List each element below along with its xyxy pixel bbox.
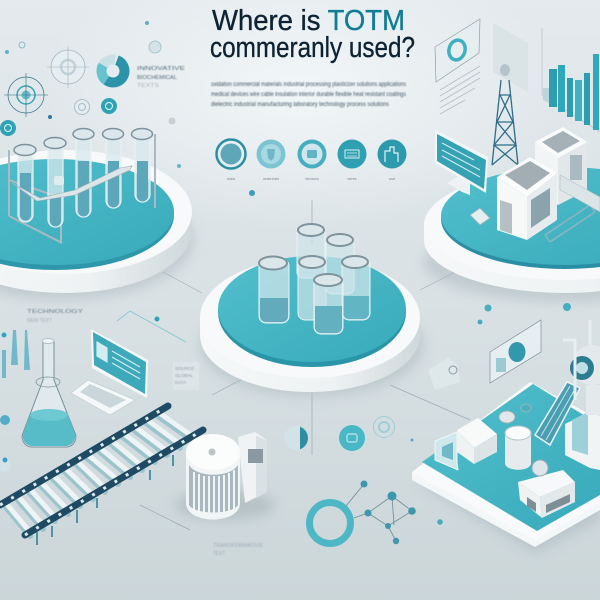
teal accent bbox=[117, 311, 186, 342]
label: innovative: BIOCHEMICAL bbox=[137, 75, 177, 81]
rack shelf bbox=[12, 166, 132, 201]
monitor bbox=[435, 130, 488, 199]
icon: camera bbox=[298, 140, 326, 181]
panel: right platform with servers bbox=[423, 127, 600, 302]
dots bbox=[410, 303, 571, 525]
icon: camera: devices bbox=[305, 176, 319, 181]
conveyor belt bbox=[0, 406, 203, 545]
server rear bbox=[535, 127, 587, 205]
dotted data panel bbox=[493, 23, 528, 92]
label: innovative: INNOVATIVE bbox=[137, 66, 185, 72]
blurry text card bbox=[173, 362, 199, 390]
panel: bottom-right isometric platform bbox=[412, 320, 600, 553]
tube 5 bbox=[132, 128, 152, 202]
blurry caption bbox=[213, 543, 264, 557]
chart: ring bbox=[310, 502, 350, 544]
jar back right bbox=[326, 234, 354, 294]
icon: buildings: use bbox=[389, 176, 396, 181]
icons: small circles bbox=[0, 21, 255, 196]
small table and parts bbox=[470, 205, 595, 242]
small disc items bbox=[499, 404, 531, 423]
side box bbox=[238, 432, 267, 503]
icon: shield: materials bbox=[263, 176, 279, 181]
half circle bbox=[284, 426, 308, 450]
icon: ring gauge: data bbox=[227, 176, 236, 181]
platform base bbox=[412, 382, 600, 553]
jars bbox=[259, 224, 370, 334]
label: technology bbox=[27, 309, 83, 324]
ramp bbox=[535, 382, 580, 445]
jar back left bbox=[297, 224, 325, 278]
panel: center platform with jars bbox=[200, 224, 424, 397]
machine tower bbox=[563, 320, 600, 470]
cylinder jar bbox=[505, 426, 531, 470]
legs bbox=[37, 455, 173, 545]
label: innovative: TEXTS bbox=[137, 83, 159, 89]
icon: factory: wires bbox=[347, 176, 357, 181]
bar chart bbox=[542, 28, 600, 132]
icon: ring gauge bbox=[216, 140, 246, 181]
text block: intro paragraph: medical devices wire cable insulation interior durable flexible heat resistant coatings bbox=[211, 92, 406, 98]
platform disc bbox=[423, 167, 600, 302]
chart: donut bbox=[97, 55, 129, 87]
rollers bbox=[5, 412, 192, 536]
network diagram bbox=[346, 480, 416, 544]
test tubes on rack bbox=[9, 128, 155, 243]
jar middle bbox=[298, 256, 326, 320]
icon: teal circle bbox=[339, 425, 365, 451]
panel: lower-center icons bbox=[284, 303, 571, 544]
icon: buildings bbox=[378, 140, 406, 181]
keyboard bbox=[71, 380, 135, 415]
text block: intro paragraph: dielectric industrial manufacturing laboratory technology process solutions bbox=[211, 102, 389, 108]
text block: intro paragraph bbox=[211, 82, 406, 108]
tube 3 bbox=[73, 128, 94, 217]
shadow bbox=[175, 490, 275, 520]
front box bbox=[518, 460, 575, 518]
jar left bbox=[259, 256, 289, 323]
label: innovative bbox=[137, 66, 185, 89]
connector lines bbox=[140, 200, 470, 530]
text block: intro paragraph: oxidation commercial materials industrial processing plasticizer solutions applications bbox=[211, 82, 406, 88]
rails bbox=[0, 406, 203, 535]
server front bbox=[497, 157, 557, 240]
rack bbox=[9, 134, 155, 243]
cylinder bbox=[186, 434, 240, 520]
panel: top-right analytics bbox=[435, 19, 600, 165]
platform disc bbox=[0, 150, 194, 300]
title: Where is TOTM bbox=[212, 5, 405, 37]
icon: target dial bbox=[4, 73, 48, 117]
panel: lower-left lab tubes bbox=[0, 309, 199, 472]
icon: shield bbox=[256, 140, 286, 181]
icon row bbox=[216, 140, 406, 181]
glass box bbox=[435, 432, 458, 470]
white box bbox=[457, 418, 497, 464]
label: technology: NEW TEXT bbox=[27, 318, 53, 324]
panel: left platform with test tubes bbox=[0, 128, 194, 300]
tower bbox=[492, 64, 518, 165]
tube 4 bbox=[102, 128, 124, 208]
label: technology: TECHNOLOGY bbox=[27, 309, 83, 315]
tube 2 bbox=[44, 138, 66, 227]
flask bbox=[22, 338, 76, 447]
air filter unit bbox=[175, 432, 275, 520]
floating panel with ring bbox=[435, 19, 480, 114]
blurry text card: DATA bbox=[175, 380, 186, 385]
jar right bbox=[342, 256, 370, 320]
conveyor panel bbox=[560, 175, 600, 212]
icon: outlined circle bbox=[374, 416, 394, 438]
blurry caption: TEXT bbox=[213, 551, 225, 557]
blurry text card: SOURCE bbox=[175, 366, 194, 371]
title: commeranly used? bbox=[210, 32, 415, 64]
icon: gear circle bbox=[47, 46, 89, 88]
platform disc bbox=[200, 256, 424, 397]
jar front bbox=[314, 274, 343, 334]
icon: factory bbox=[338, 140, 366, 181]
blurry caption: TRANSFORMATIVE bbox=[213, 543, 264, 549]
panel: top-left lab graphics bbox=[0, 21, 255, 196]
floating card bbox=[490, 320, 541, 383]
tube 1 bbox=[14, 144, 36, 222]
title bbox=[210, 5, 415, 64]
monitor bbox=[91, 329, 148, 398]
floating small card bbox=[428, 358, 460, 390]
small tubes bbox=[0, 330, 30, 472]
blurry text card: GLOBAL bbox=[175, 373, 194, 378]
